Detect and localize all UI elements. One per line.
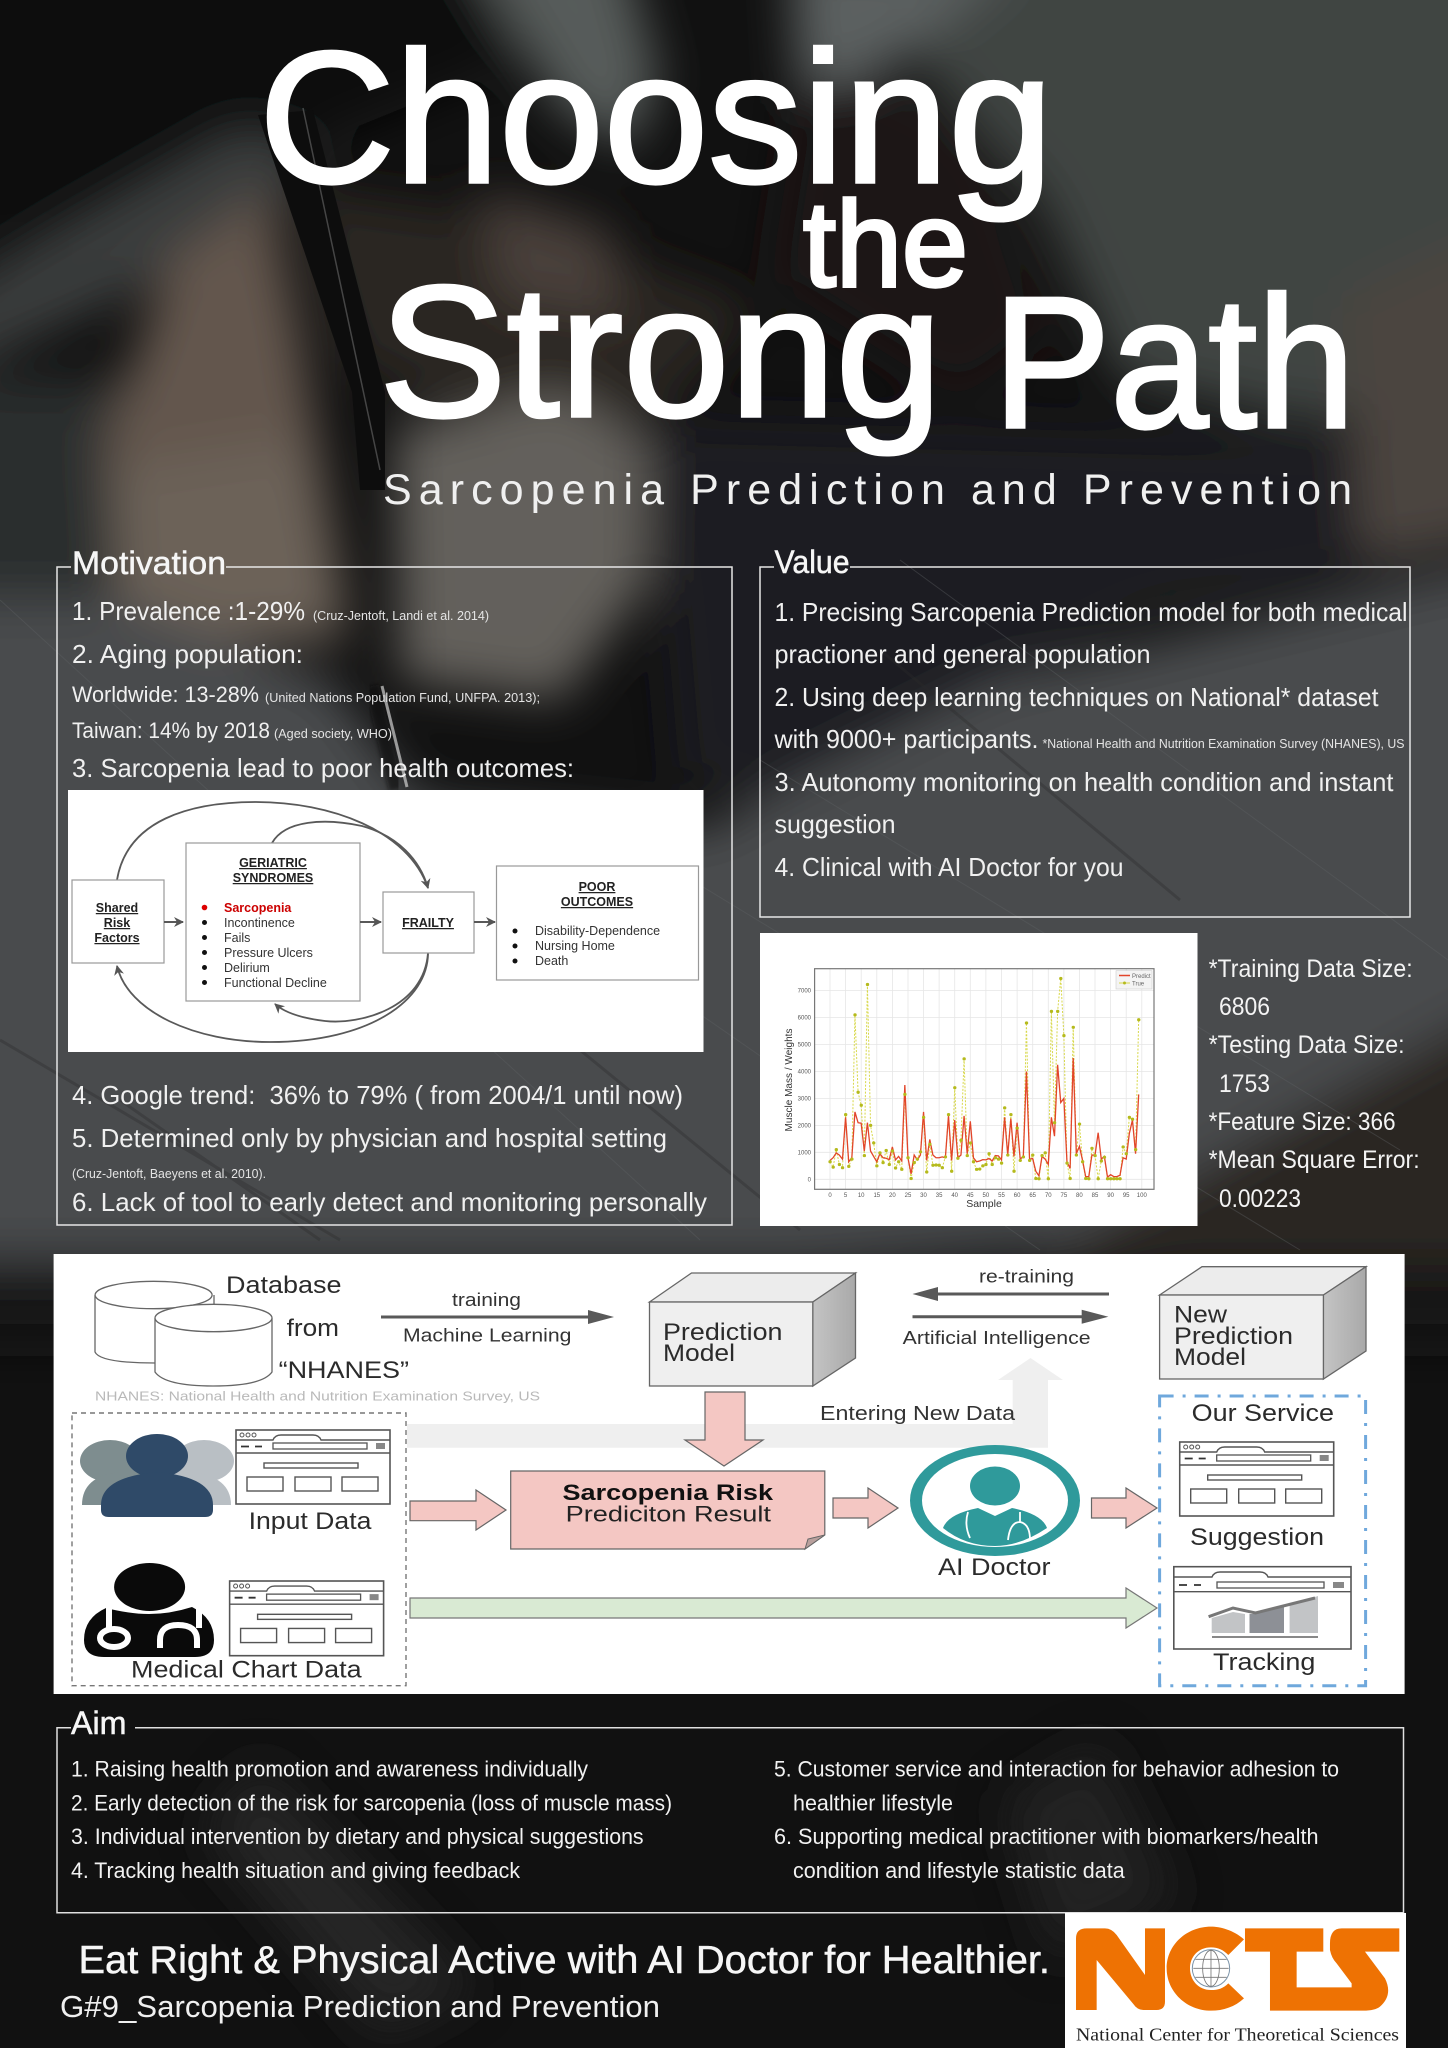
text: retraining labels: Artificial Intelligence (903, 1328, 1091, 1348)
stats: data sizes: *Mean Square Error: (1209, 1146, 1420, 1174)
group: our service dashed box (1160, 1396, 1366, 1686)
text: value list (774, 597, 1408, 882)
stats: data sizes: 1753 (1219, 1070, 1270, 1098)
text: tracking: Tracking (1213, 1649, 1315, 1676)
panel: aim (57, 1705, 1404, 1913)
diagram: geriatric syndromes flow: Death (535, 954, 568, 968)
chart x ticks: 55 (998, 1193, 1005, 1199)
text: retraining labels: re-training (979, 1267, 1074, 1287)
heading: aim: Aim (71, 1705, 126, 1741)
heading: motivation: Motivation (72, 545, 226, 581)
chart x ticks: 40 (951, 1193, 959, 1199)
text: lack of tool: 6. Lack of tool to early detect and monitoring personally (72, 1187, 707, 1217)
chart: muscle mass prediction (760, 933, 1198, 1226)
box: prediction model: Model (663, 1340, 735, 1367)
text: taiwan (72, 718, 392, 743)
chart axis titles: Muscle Mass / Weights (783, 1028, 795, 1132)
chart x ticks: 65 (1029, 1193, 1037, 1199)
chart axis titles (783, 1028, 1002, 1210)
chart x ticks: 80 (1076, 1193, 1083, 1199)
heading: value: Value (774, 544, 850, 580)
series: predict (830, 1058, 1139, 1177)
text: prevalence: (Cruz-Jentoft, Landi et al. 2014) (313, 608, 489, 623)
title: Choosing (259, 13, 1053, 222)
arrow: model to result (685, 1392, 763, 1466)
text: entering new data: Entering New Data (820, 1403, 1016, 1425)
group: data inputs dashed box (72, 1413, 406, 1686)
chart x ticks: 75 (1061, 1193, 1068, 1199)
diagram: geriatric syndromes flow: Nursing Home (535, 939, 615, 953)
box: sarcopenia risk result: Prediciton Result (566, 1502, 771, 1527)
text: worldwide: Worldwide: 13-28% (72, 682, 259, 707)
chart x ticks: 20 (889, 1193, 896, 1199)
text: prevalence: 1. Prevalence :1-29% (72, 596, 305, 626)
panel: system flow diagram (54, 1254, 1405, 1694)
text: database from NHANES (226, 1272, 409, 1384)
chart y ticks (798, 988, 812, 1184)
text: aims right column: 6. Supporting medical practitioner with biomarkers/health (774, 1824, 1318, 1849)
diagram: geriatric syndromes flow: Delirium (224, 961, 270, 975)
panel: value (760, 544, 1410, 917)
text: medical chart data: Medical Chart Data (131, 1657, 362, 1684)
panel: motivation (57, 545, 732, 1225)
text: value list: 2. Using deep learning techniques on National* dataset (774, 682, 1379, 712)
arrow: entering new data band (407, 1358, 1063, 1448)
text: taiwan: (Aged society, WHO) (274, 726, 392, 741)
diagram: geriatric syndromes flow: GERIATRIC (239, 856, 307, 870)
stats: data sizes: *Feature Size: 366 (1209, 1108, 1396, 1136)
text: nhanes note: NHANES: National Health and Nutrition Examination Survey, US (95, 1389, 540, 1404)
chart x ticks: 60 (1014, 1193, 1021, 1199)
tagline: Eat Right & Physical Active with AI Doctor for Healthier. (78, 1939, 1050, 1982)
chart x ticks: 100 (1137, 1193, 1147, 1199)
chart x ticks: 95 (1123, 1193, 1130, 1199)
text: value list: with 9000+ participants. (774, 724, 1038, 754)
stats: data sizes: *Testing Data Size: (1209, 1031, 1405, 1059)
diagram: geriatric syndromes flow: Shared (96, 901, 138, 915)
text: training labels (403, 1290, 571, 1346)
text: prevalence (72, 596, 489, 626)
text: training labels: training (452, 1290, 521, 1310)
icon: physician (84, 1563, 214, 1657)
chart x ticks: 45 (967, 1193, 974, 1199)
text: worldwide: (United Nations Population Fund, UNFPA. 2013); (265, 690, 540, 705)
icon: input browser window (236, 1430, 390, 1504)
title: Strong (379, 247, 942, 456)
box: new prediction model (1160, 1267, 1366, 1379)
diagram: geriatric syndromes flow: SYNDROMES (233, 871, 313, 885)
box: sarcopenia risk result (511, 1471, 825, 1549)
text: value list: 3. Autonomy monitoring on health condition and instant (774, 767, 1394, 797)
text: determined by physician: 5. Determined only by physician and hospital setting (72, 1123, 667, 1153)
chart y ticks: 1000 (798, 1150, 812, 1156)
chart legend: True (1132, 982, 1145, 988)
logo: NCTS (1065, 1913, 1406, 2048)
text: aging population: 2. Aging population: (72, 639, 303, 669)
text: retraining labels (903, 1267, 1091, 1348)
text: value list: suggestion (774, 809, 896, 839)
text: our service: Our Service (1192, 1400, 1334, 1427)
arrow: input to result (410, 1490, 506, 1530)
series: true markers (830, 979, 1139, 1179)
chart x ticks: 30 (920, 1193, 927, 1199)
chart y ticks: 5000 (798, 1042, 812, 1048)
chart y ticks: 4000 (798, 1070, 812, 1076)
diagram: geriatric syndromes flow: POOR (579, 880, 615, 894)
icon: chart browser window (230, 1581, 384, 1656)
arrow: result to ai doctor (833, 1488, 898, 1528)
text: value list: *National Health and Nutrition Examination Survey (NHANES), US (1042, 736, 1405, 751)
box: new prediction model: Prediction (1174, 1323, 1293, 1350)
arrows: retraining (912, 1287, 1109, 1324)
text: ai doctor: AI Doctor (938, 1554, 1051, 1581)
subtitle: Sarcopenia Prediction and Prevention (383, 466, 1352, 514)
stats: data sizes: *Training Data Size: (1209, 955, 1413, 983)
stats: data sizes (1209, 955, 1420, 1213)
text: training labels: Machine Learning (403, 1326, 571, 1346)
diagram: geriatric syndromes flow: Functional Decline (224, 976, 327, 990)
chart y ticks: 3000 (798, 1096, 812, 1102)
text: suggestion: Suggestion (1190, 1524, 1324, 1551)
chart y ticks: 0 (808, 1178, 812, 1184)
arrow: ai doctor to service (1092, 1488, 1157, 1528)
text: poor health outcomes: 3. Sarcopenia lead to poor health outcomes: (72, 753, 574, 783)
text: aims left column: 1. Raising health promotion and awareness individually (71, 1757, 588, 1782)
diagram: geriatric syndromes flow: Fails (224, 931, 250, 945)
chart y ticks: 7000 (798, 988, 812, 994)
chart legend: Predict (1132, 974, 1151, 980)
icon: tracking browser (1174, 1567, 1351, 1649)
text: aims left column: 2. Early detection of the risk for sarcopenia (loss of muscle mass) (71, 1791, 672, 1816)
text: aims left column: 3. Individual intervention by dietary and physical suggestions (71, 1824, 644, 1849)
box: sarcopenia risk result: Sarcopenia Risk (562, 1480, 774, 1505)
chart x ticks: 5 (844, 1193, 848, 1199)
chart x ticks (828, 1193, 1147, 1199)
text: database from NHANES: Database (226, 1272, 342, 1299)
diagram: geriatric syndromes flow: FRAILTY (402, 916, 455, 930)
text: database from NHANES: “NHANES” (279, 1357, 409, 1384)
text: aims left column (71, 1757, 672, 1883)
text: taiwan: Taiwan: 14% by 2018 (72, 718, 270, 743)
chart x ticks: 35 (936, 1193, 943, 1199)
box: prediction model (650, 1273, 856, 1386)
text: aims right column (774, 1757, 1339, 1883)
text: worldwide (72, 682, 540, 707)
chart y ticks: 2000 (798, 1124, 812, 1130)
chart x ticks: 25 (905, 1193, 912, 1199)
text: citation: (Cruz-Jentoft, Baeyens et al. 2010). (72, 1166, 266, 1181)
arrow: training (381, 1310, 614, 1324)
box: prediction model: Prediction (663, 1319, 782, 1346)
chart x ticks: 70 (1045, 1193, 1052, 1199)
chart x ticks: 0 (828, 1193, 832, 1199)
chart x ticks: 85 (1092, 1193, 1099, 1199)
diagram: geriatric syndromes flow: Risk (104, 916, 130, 930)
series: true (830, 979, 1139, 1179)
text: database from NHANES: from (287, 1315, 339, 1342)
box: new prediction model: Model (1174, 1344, 1246, 1371)
diagram: geriatric syndromes flow: OUTCOMES (561, 895, 633, 909)
text: input data: Input Data (249, 1508, 372, 1535)
chart x ticks: 90 (1107, 1193, 1115, 1199)
stats: data sizes: 0.00223 (1219, 1185, 1301, 1213)
diagram: geriatric syndromes flow: Disability-Dependence (535, 924, 660, 938)
icon: database cylinders (95, 1281, 272, 1386)
arrow: chart data to tracking (410, 1588, 1157, 1628)
text: value list: 1. Precising Sarcopenia Prediction model for both medical (774, 597, 1408, 627)
text: aims right column: condition and lifestyle statistic data (793, 1858, 1125, 1883)
diagram: geriatric syndromes flow: Factors (94, 931, 140, 945)
text: value list: practioner and general population (774, 639, 1150, 669)
icon: suggestion browser (1180, 1442, 1334, 1516)
text: aims right column: healthier lifestyle (793, 1791, 953, 1816)
box: new prediction model: New (1174, 1302, 1228, 1329)
group id label: G#9_Sarcopenia Prediction and Prevention (60, 1989, 660, 2024)
chart x ticks: 10 (858, 1193, 865, 1199)
icon: patients (80, 1434, 234, 1517)
title: Path (993, 258, 1355, 467)
text: google trend: 4. Google trend: 36% to 79% ( from 2004/1 until now) (72, 1080, 683, 1110)
diagram: geriatric syndromes flow: Sarcopenia (224, 901, 292, 915)
logo: NCTS: National Center for Theoretical Sciences (1076, 2025, 1399, 2045)
chart x ticks: 15 (873, 1193, 881, 1199)
chart y ticks: 6000 (798, 1016, 812, 1022)
diagram: geriatric syndromes flow: Incontinence (224, 916, 295, 930)
chart legend (1116, 971, 1152, 989)
diagram: geriatric syndromes flow: Pressure Ulcers (224, 946, 313, 960)
stats: data sizes: 6806 (1219, 993, 1270, 1021)
chart x ticks: 50 (983, 1193, 990, 1199)
text: aims right column: 5. Customer service and interaction for behavior adhesion to (774, 1757, 1339, 1782)
text: value list: 4. Clinical with AI Doctor for you (774, 852, 1124, 882)
diagram: geriatric syndromes flow (68, 790, 704, 1052)
text: aims left column: 4. Tracking health situation and giving feedback (71, 1858, 521, 1883)
title (259, 13, 1355, 467)
title: the (803, 176, 968, 312)
icon: ai doctor (910, 1445, 1080, 1556)
chart axis titles: Sample (966, 1198, 1002, 1210)
